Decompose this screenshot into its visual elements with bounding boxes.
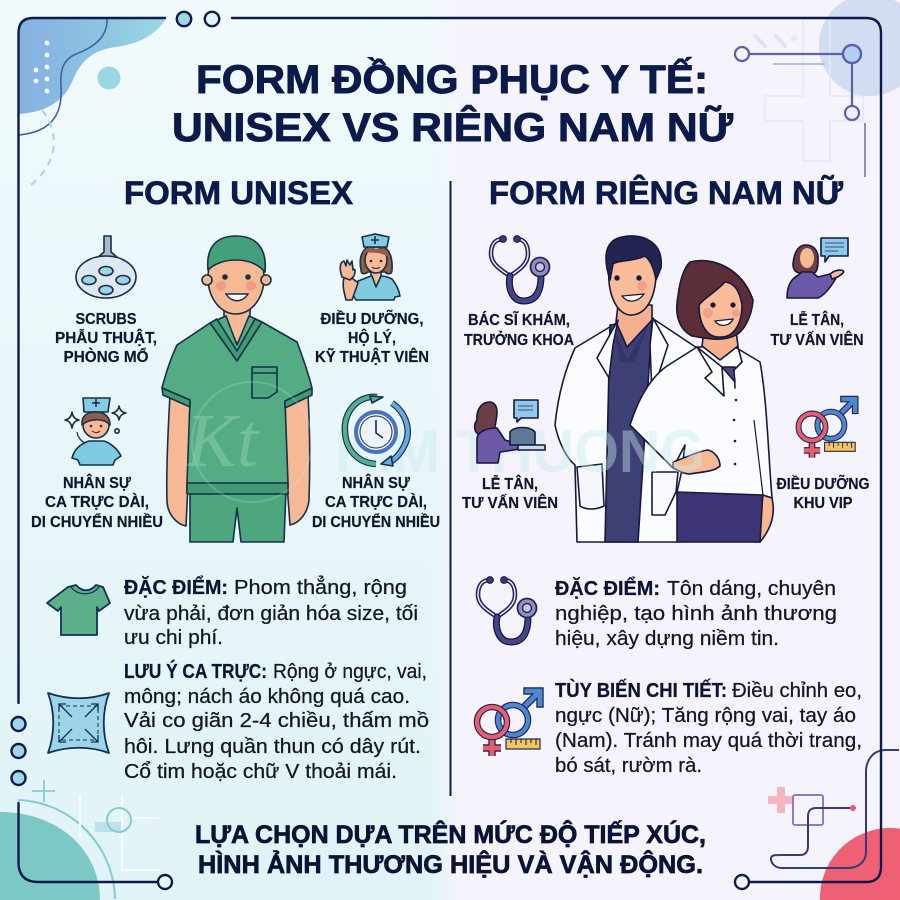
- text: lưu ý ca trực: Cổ tim hoặc chữ V thoải mái.: [124, 761, 397, 783]
- text: tùy biến chi tiết: (Nam). Tránh may quá thời trang,: [555, 730, 862, 752]
- label: scrubs phẫu thuật: SCRUBS: [76, 311, 136, 328]
- label: nhân sự ca trực dài (right): [312, 474, 440, 531]
- label: lễ tân left: LỄ TÂN,: [482, 475, 538, 493]
- text: đặc điểm riêng: ĐẶC ĐIỂM:: [555, 577, 660, 600]
- icon: clock with cycle arrows: [345, 396, 408, 466]
- footer conclusion: [195, 819, 706, 879]
- label: lễ tân right: LỄ TÂN,: [790, 311, 844, 329]
- icon: receptionist at desk: [475, 400, 545, 463]
- text: tùy biến chi tiết: bó sát, rườm rà.: [555, 755, 702, 777]
- text: đặc điểm riêng: [555, 577, 837, 650]
- text: đặc điểm unisex: Phom thẳng, rộng: [234, 575, 407, 599]
- illustration: doctors in white coats: [555, 236, 773, 542]
- label: điều dưỡng: [315, 310, 429, 366]
- label: điều dưỡng khu vip: [776, 475, 870, 512]
- decoration: bottom-right shapes: [768, 750, 900, 900]
- icon: stretch fabric: [48, 693, 109, 753]
- label: bác sĩ khám: BÁC SĨ KHÁM,: [468, 311, 570, 329]
- label: lễ tân left: TƯ VẤN VIÊN: [462, 494, 558, 512]
- label: điều dưỡng: HỘ LÝ,: [348, 329, 396, 347]
- label: lễ tân right: TƯ VẤN VIÊN: [770, 331, 864, 349]
- label: nhân sự ca trực dài (left): NHÂN SỰ: [63, 474, 131, 492]
- text: đặc điểm riêng: nghiệp, tạo hình ảnh thương: [555, 603, 837, 625]
- text: lưu ý ca trực: hôi. Lưng quần thun có dây rút.: [124, 736, 421, 758]
- icon: gender symbols small: [477, 691, 540, 756]
- label: scrubs phẫu thuật: PHẪU THUẬT,: [55, 329, 157, 347]
- text: đặc điểm unisex: ưu chi phí.: [124, 627, 223, 649]
- title: FORM ĐỒNG PHỤC Y TẾ:: [196, 56, 708, 102]
- text: đặc điểm unisex: ĐẶC ĐIỂM:: [124, 576, 228, 599]
- watermark: KIM THUONG: [335, 418, 705, 485]
- watermark: [185, 382, 705, 502]
- text: đặc điểm riêng: hiệu, xây dựng niềm tin.: [555, 628, 779, 650]
- text: lưu ý ca trực: Rộng ở ngực, vai,: [273, 661, 427, 683]
- illustration: surgeon in green scrubs: [162, 236, 312, 542]
- title: UNISEX VS RIÊNG NAM NỮ: [172, 104, 734, 150]
- text: lưu ý ca trực: LƯU Ý CA TRỰC:: [124, 659, 267, 683]
- label: điều dưỡng khu vip: ĐIỀU DƯỠNG: [776, 475, 870, 493]
- text: lưu ý ca trực: mông; nách áo không quá cao.: [124, 686, 410, 708]
- label: nhân sự ca trực dài (right): CA TRỰC DÀI,: [325, 494, 427, 511]
- label: lễ tân right: [770, 311, 864, 349]
- heading: form unisex: FORM UNISEX: [124, 175, 354, 211]
- icon: receptionist speaking: [787, 238, 848, 298]
- label: nhân sự ca trực dài (left): [31, 474, 163, 531]
- label: điều dưỡng: ĐIỀU DƯỠNG,: [320, 310, 424, 328]
- decoration: top-left blob: [19, 19, 166, 188]
- text: đặc điểm riêng: Tôn dáng, chuyên: [667, 578, 836, 600]
- icon: stethoscope large: [491, 236, 550, 301]
- icon: gender symbols with ruler: [798, 399, 855, 458]
- label: điều dưỡng: KỸ THUẬT VIÊN: [315, 348, 429, 366]
- label: scrubs phẫu thuật: PHÒNG MỔ: [64, 348, 148, 366]
- text: tùy biến chi tiết: [555, 678, 862, 777]
- label: bác sĩ khám: TRƯỞNG KHOA: [464, 331, 574, 349]
- icon: nurse waving: [340, 234, 400, 300]
- label: bác sĩ khám: [464, 311, 574, 349]
- icon: t-shirt: [47, 585, 110, 635]
- text: đặc điểm unisex: vừa phải, đơn giản hóa size, tối: [124, 603, 418, 625]
- label: nhân sự ca trực dài (right): DI CHUYỂN NHIỀU: [312, 513, 440, 531]
- footer conclusion: HÌNH ẢNH THƯƠNG HIỆU VÀ VẬN ĐỘNG.: [198, 849, 703, 879]
- label: nhân sự ca trực dài (left): DI CHUYỂN NHIỀU: [31, 513, 163, 531]
- title: [172, 56, 734, 150]
- label: scrubs phẫu thuật: [55, 311, 157, 366]
- heading: form riêng nam nữ: FORM RIÊNG NAM NỮ: [489, 175, 843, 211]
- footer conclusion: LỰA CHỌN DỰA TRÊN MỨC ĐỘ TIẾP XÚC,: [195, 819, 706, 849]
- label: nhân sự ca trực dài (left): CA TRỰC DÀI,: [45, 494, 149, 511]
- icon: stethoscope small: [478, 577, 536, 642]
- icon: surgical lamp: [76, 236, 136, 298]
- text: đặc điểm unisex: [124, 575, 418, 649]
- decoration: top-right circuit: [735, 0, 900, 177]
- text: lưu ý ca trực: [124, 659, 429, 783]
- icon: on-shift staff: [65, 398, 126, 465]
- text: tùy biến chi tiết: Điều chỉnh eo,: [732, 680, 862, 702]
- text: tùy biến chi tiết: ngực (Nữ); Tăng rộng vai, tay áo: [555, 705, 856, 727]
- label: lễ tân left: [462, 475, 558, 512]
- watermark: Kt: [185, 399, 260, 483]
- text: tùy biến chi tiết: TÙY BIẾN CHI TIẾT:: [555, 678, 727, 702]
- text: lưu ý ca trực: Vải co giãn 2-4 chiều, thấm mồ: [124, 710, 429, 732]
- center divider: [450, 181, 452, 796]
- label: nhân sự ca trực dài (right): NHÂN SỰ: [342, 474, 410, 492]
- decoration: bottom-left shapes: [0, 780, 160, 900]
- label: điều dưỡng khu vip: KHU VIP: [794, 495, 852, 512]
